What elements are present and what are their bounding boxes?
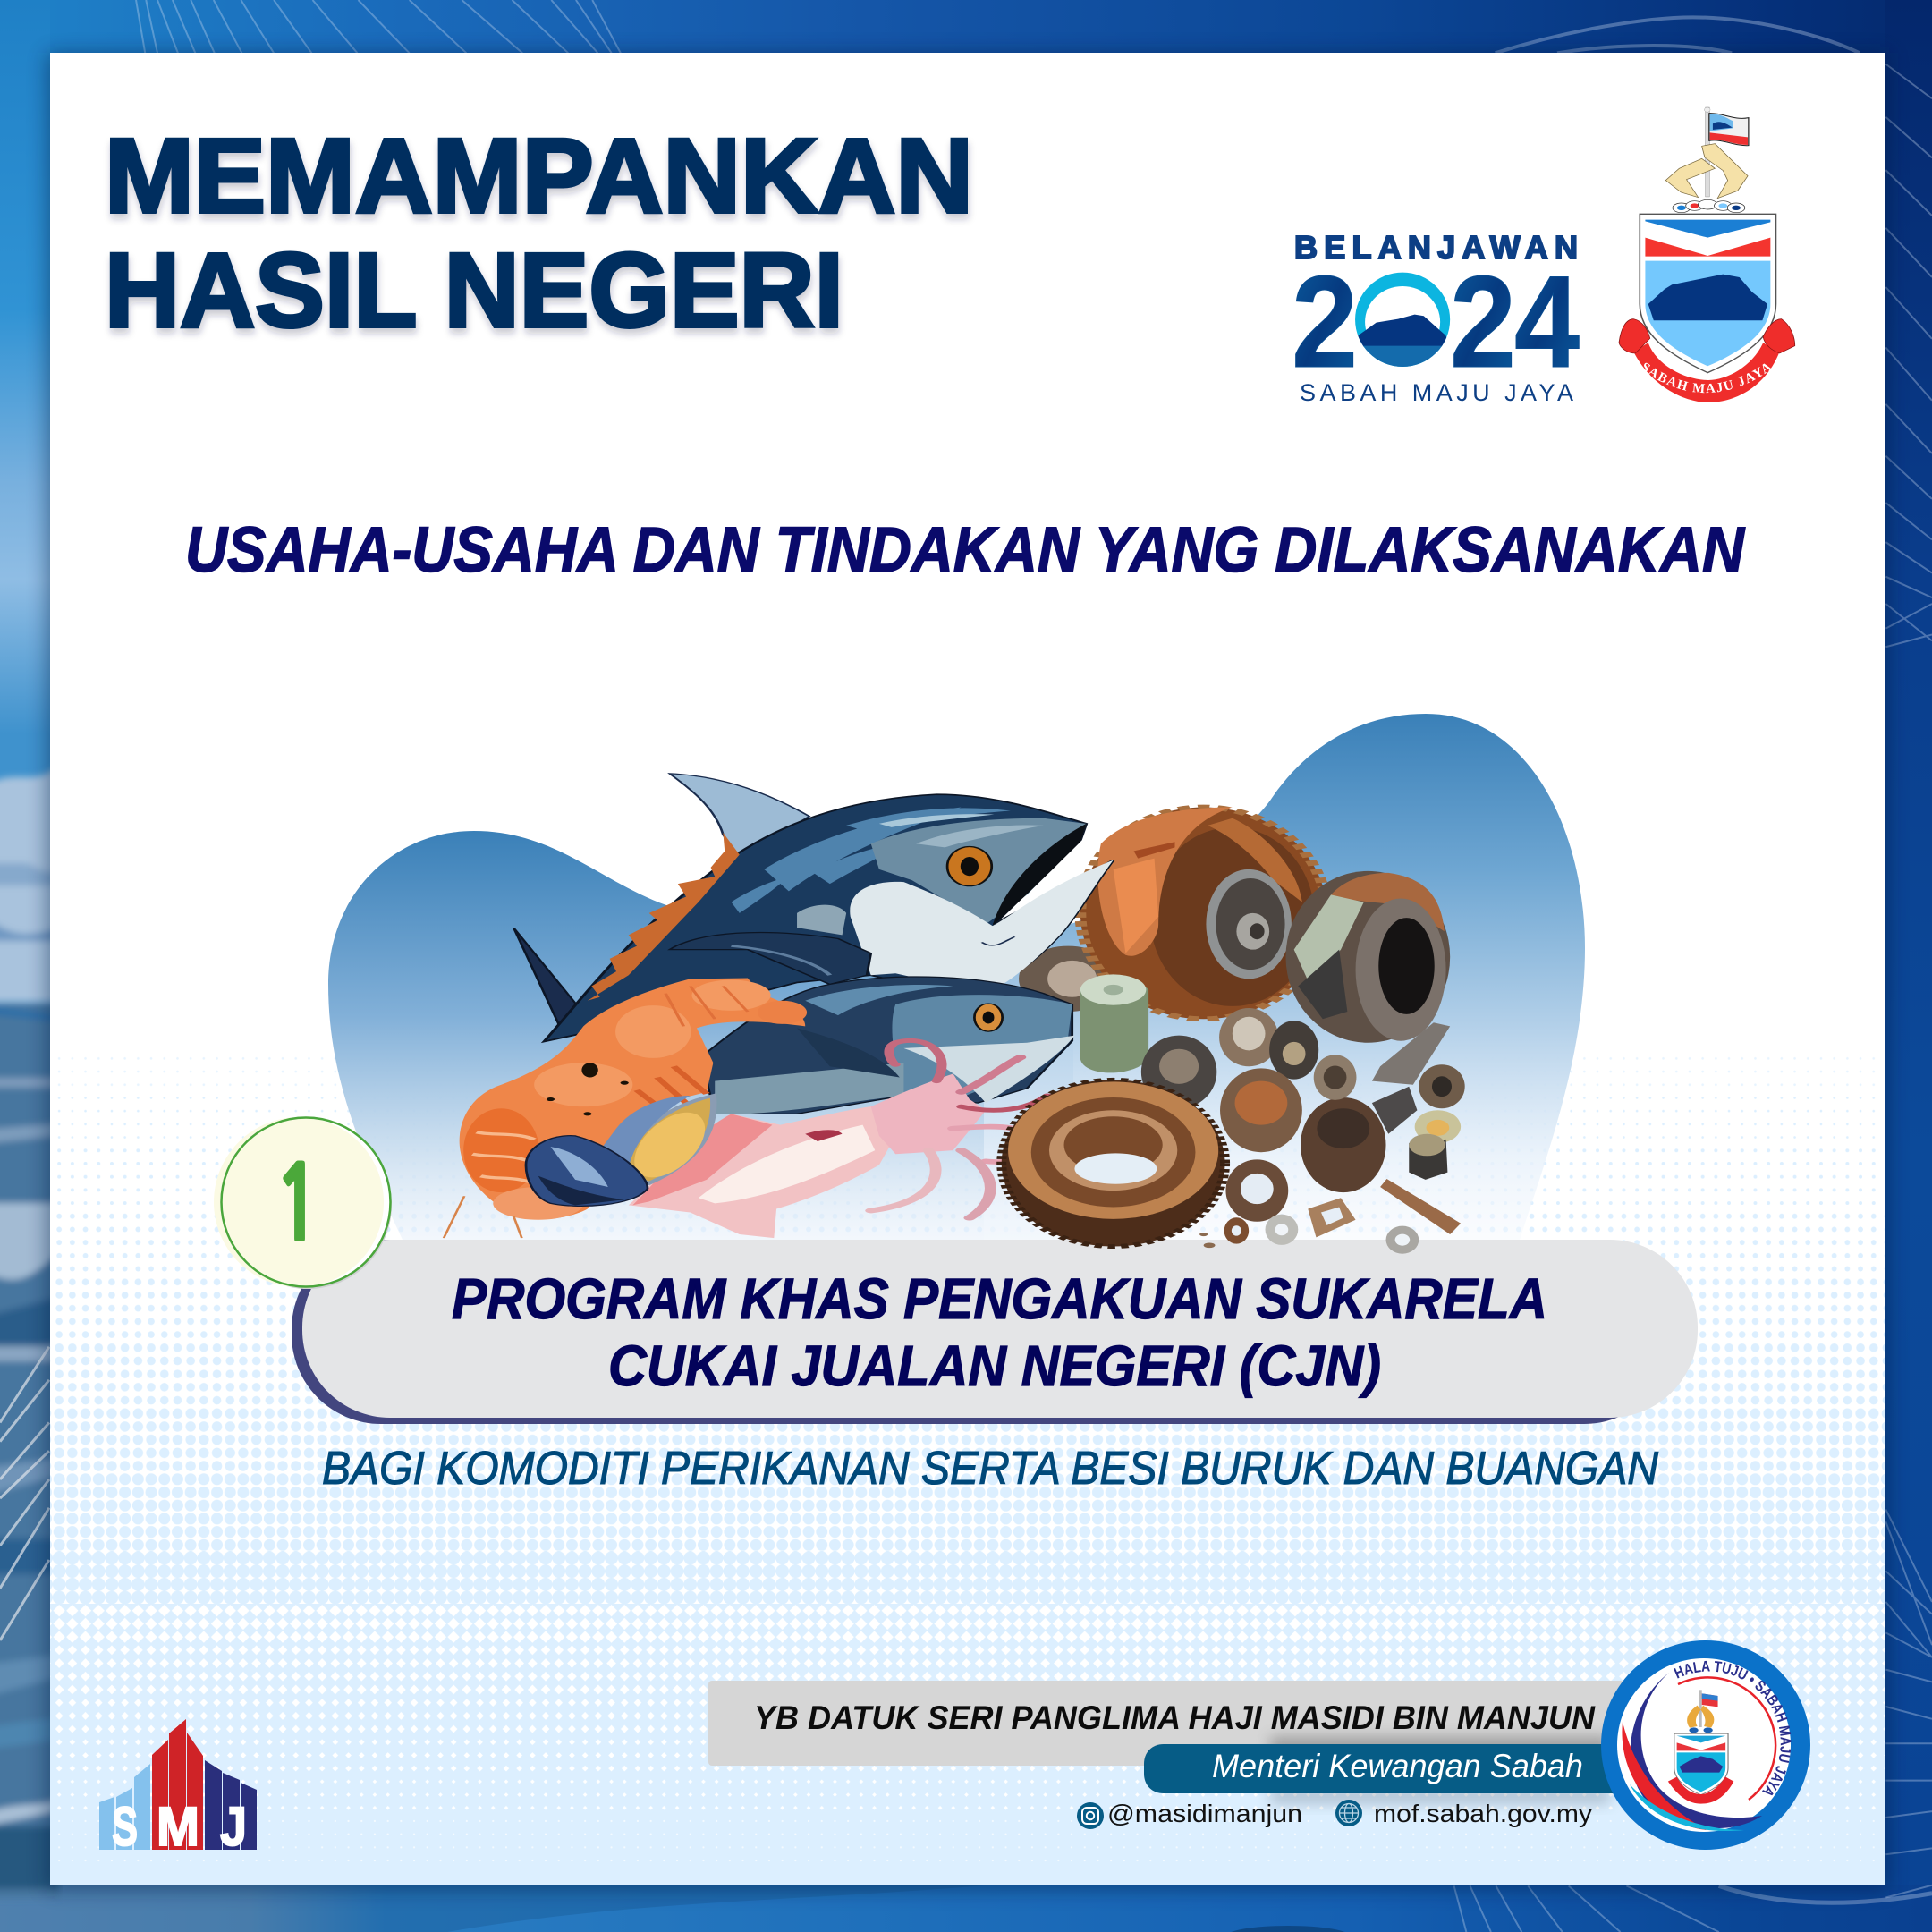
- logo: Belanjawan 2024: SABAH MAJU JAYA: [1300, 379, 1573, 406]
- minister role pill: [1144, 1737, 1628, 1803]
- illustration: prawn: [444, 978, 807, 1238]
- title: HASIL NEGERI: [105, 232, 843, 350]
- title: [105, 117, 973, 350]
- logo: Belanjawan 2024: 0: [1368, 261, 1428, 381]
- illustration: second worn gear: [1285, 871, 1450, 1043]
- illustration: small tuna: [699, 977, 1074, 1114]
- logo: Belanjawan 2024: 2: [1292, 249, 1358, 394]
- mini crest: [1668, 1690, 1733, 1804]
- logo: Belanjawan 2024: BELANJAWAN: [1294, 229, 1579, 266]
- minister name bar: YB DATUK SERI PANGLIMA HAJI MASIDI BIN MANJUN: [754, 1699, 1596, 1736]
- logo: SMJ: M: [157, 1796, 199, 1857]
- callout pill: programme title: [292, 1240, 1698, 1424]
- pill heading line 1: PROGRAM KHAS PENGAKUAN SUKARELA: [452, 1267, 1547, 1331]
- minister role pill: Menteri Kewangan Sabah: [1212, 1748, 1583, 1784]
- subtitle: BAGI KOMODITI PERIKANAN SERTA BESI BURUK DAN BUANGAN: [322, 1443, 1658, 1495]
- logo: Belanjawan 2024: [1292, 229, 1580, 406]
- social handle: @masidimanjun: [1107, 1800, 1302, 1827]
- website: mof.sabah.gov.my: [1374, 1800, 1592, 1827]
- logo: Hala Tuju Sabah Maju Jaya: [1601, 1640, 1810, 1850]
- minister name bar: [708, 1681, 1630, 1766]
- illustration: flat rusty gear ring: [1002, 1080, 1225, 1247]
- logo: SMJ: S: [112, 1796, 138, 1857]
- pill heading line 2: CUKAI JUALAN NEGERI (CJN): [608, 1334, 1381, 1398]
- title: MEMAMPANKAN: [105, 117, 973, 235]
- illustration: scrap parts pile: [1080, 974, 1465, 1254]
- logo: SMJ: J: [220, 1796, 247, 1857]
- illustration: big tuna: [513, 774, 1114, 1042]
- illustration: large rusty gear: [1019, 807, 1326, 1019]
- number badge: 1: [274, 1154, 322, 1256]
- logo: Sabah state crest: SABAH MAJU JAYA: [1644, 363, 1771, 394]
- logo: Sabah state crest: [1619, 107, 1796, 402]
- illustration: seafood and scrap metal: [444, 774, 1465, 1254]
- logo: Hala Tuju Sabah Maju Jaya: HALA TUJU • SABAH MAJU JAYA: [1674, 1660, 1791, 1796]
- logo: Belanjawan 2024: 4: [1514, 249, 1580, 394]
- illustration: squid: [629, 1040, 1047, 1238]
- number badge: [214, 1117, 392, 1289]
- blue organic blob backdrop: [328, 714, 1585, 1240]
- logo: Belanjawan 2024: 2: [1450, 249, 1516, 394]
- illustration: mussel: [526, 1096, 719, 1206]
- logo: SMJ: [99, 1719, 257, 1857]
- subheading: USAHA-USAHA DAN TINDAKAN YANG DILAKSANAKAN: [185, 515, 1746, 586]
